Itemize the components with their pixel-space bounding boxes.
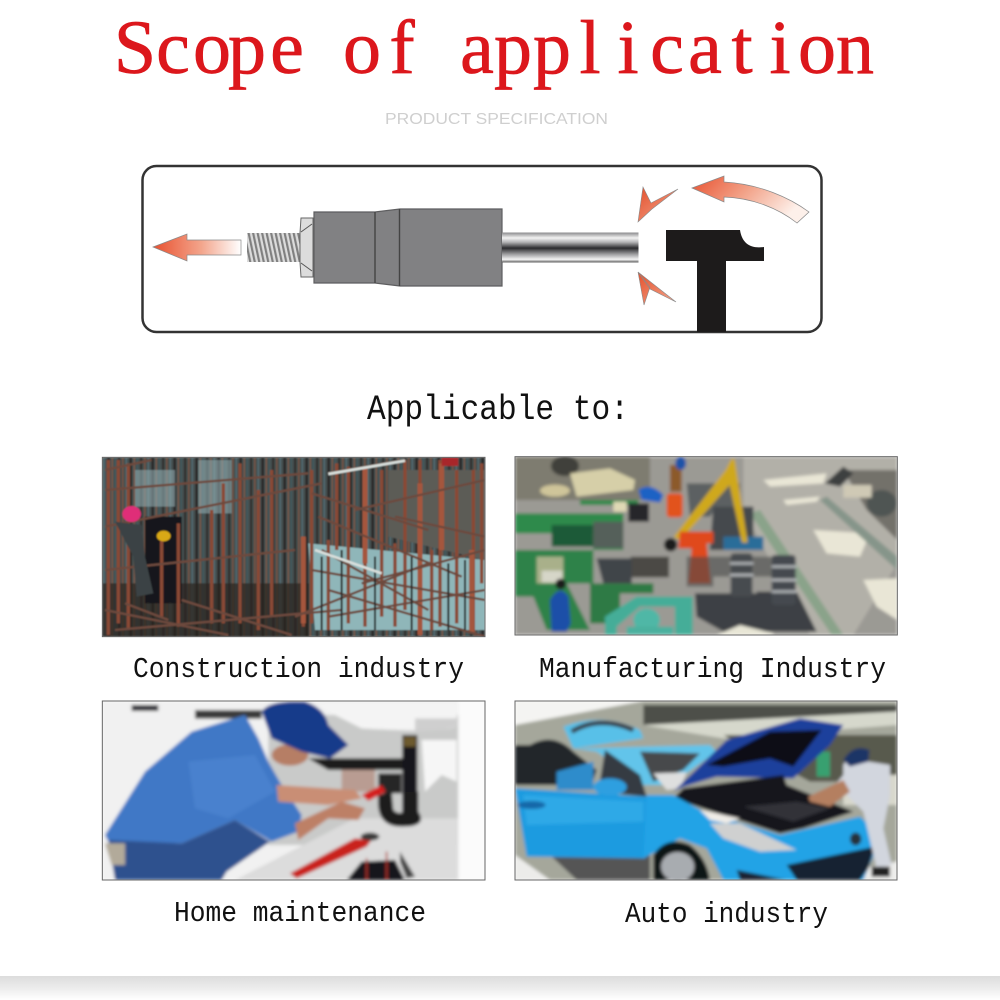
photo: car auto industry <box>515 701 897 881</box>
caption: home maintenance: Home maintenance <box>174 897 426 930</box>
threaded bolt <box>247 233 302 262</box>
diagram frame <box>142 166 822 332</box>
caption: auto industry: Auto industry <box>625 898 828 931</box>
socket body <box>314 209 502 286</box>
photo border <box>102 457 485 637</box>
icon: upper impact arrow <box>638 187 678 222</box>
icon: hammer <box>666 230 764 332</box>
photo: factory floor <box>515 456 897 635</box>
photo: construction scaffolding <box>102 457 485 637</box>
photo border <box>515 457 897 635</box>
photo: plumber home maintenance <box>102 701 485 880</box>
bottom shadow band <box>0 976 1000 1000</box>
title: Scope of application <box>114 6 874 90</box>
icon: lower impact arrow <box>638 272 676 305</box>
icon: left arrow <box>153 234 241 261</box>
heading: applicable to: Applicable to: <box>367 390 629 430</box>
hex nut <box>300 218 313 277</box>
photo border <box>102 701 485 880</box>
steel shaft <box>502 232 638 262</box>
photo border <box>515 701 897 880</box>
subtitle: product specification: PRODUCT SPECIFICATION <box>385 111 608 128</box>
panel: impact diagram <box>142 166 822 332</box>
caption: construction industry: Construction industry <box>133 653 464 686</box>
icon: curved arrow <box>692 176 809 223</box>
caption: manufacturing industry: Manufacturing Industry <box>539 653 886 686</box>
